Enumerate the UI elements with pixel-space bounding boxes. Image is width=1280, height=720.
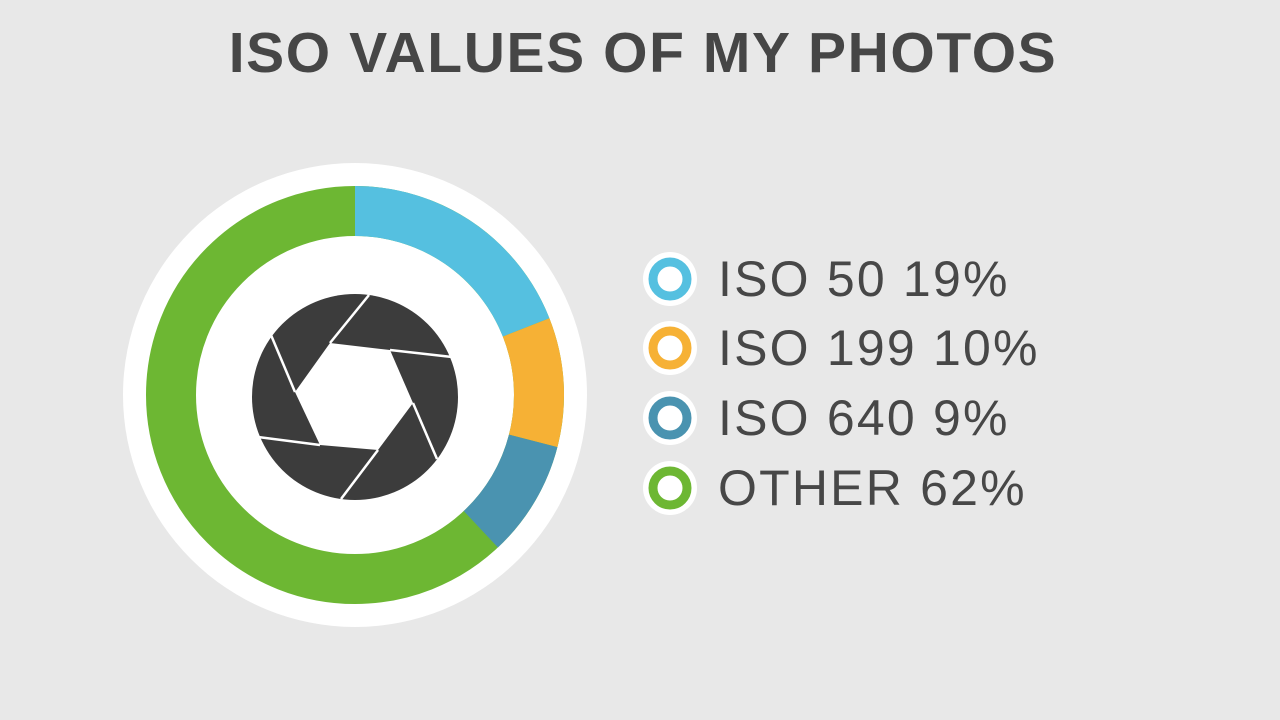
chart background disc <box>123 163 587 627</box>
icon: camera aperture <box>252 294 458 500</box>
legend: ISO 640: ISO 640 9% <box>718 390 1010 446</box>
legend: ISO 50: ISO 50 19% <box>718 251 1010 307</box>
title: ISO VALUES OF MY PHOTOS <box>229 21 1057 85</box>
donut ring <box>171 211 539 579</box>
legend: ISO 199: ISO 199 10% <box>718 320 1040 376</box>
legend: OTHER: OTHER 62% <box>718 460 1027 516</box>
